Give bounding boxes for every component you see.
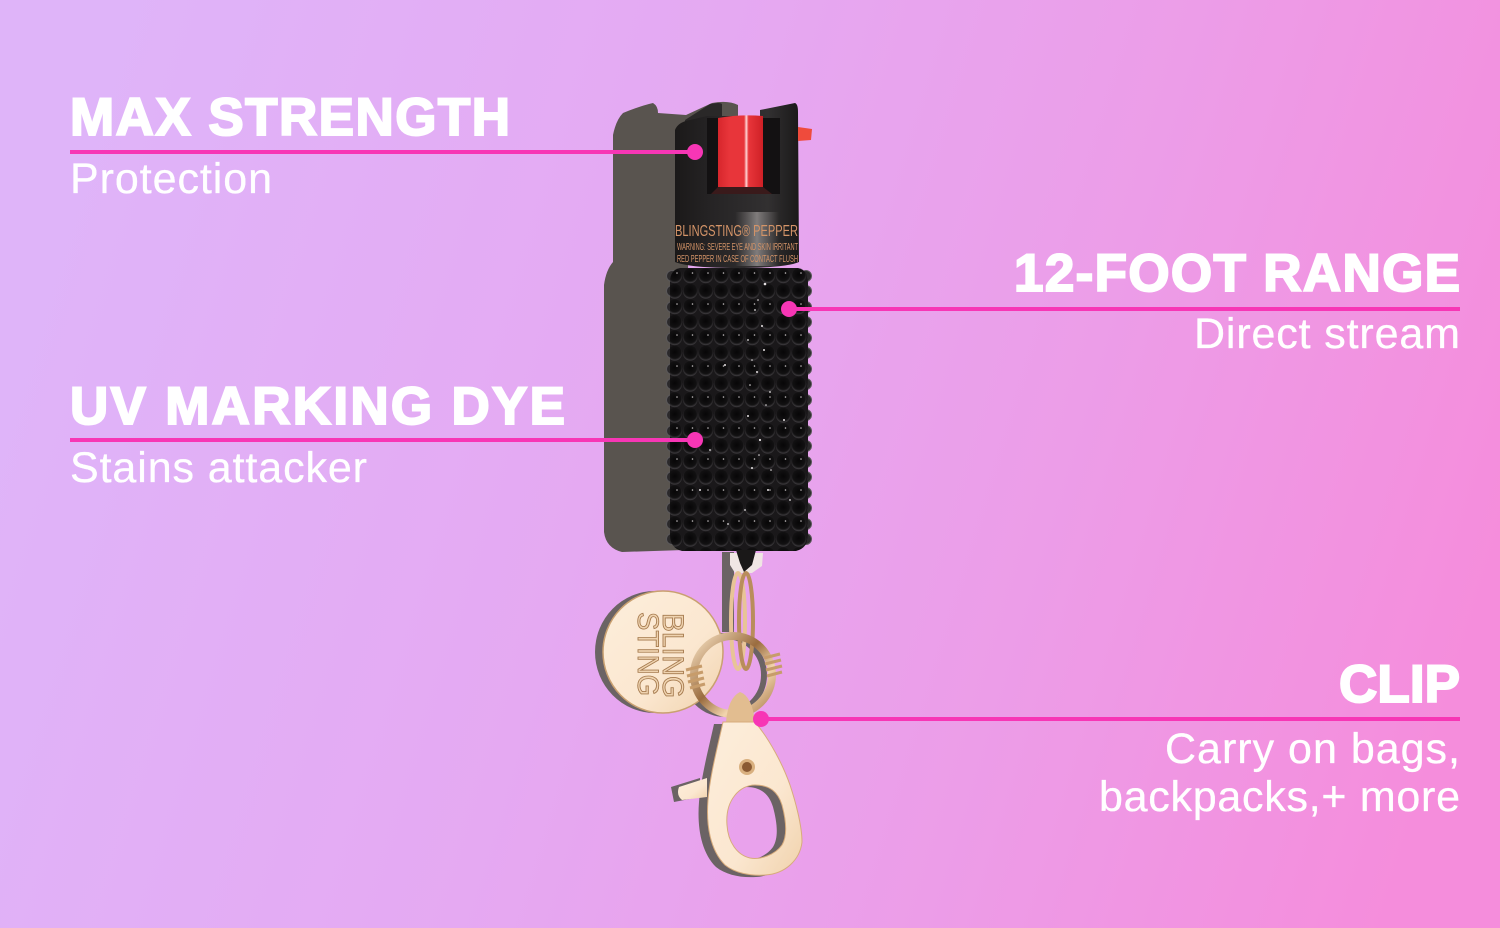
leader line to clasp — [753, 711, 1460, 727]
product: pepper spray keychain — [595, 102, 812, 877]
callout: max strength — [70, 88, 703, 203]
leader line to body — [781, 301, 1460, 317]
heading: uv marking dye: UV MARKING DYE — [70, 377, 565, 436]
cap label text: RED PEPPER IN CASE OF CONTACT FLUSH — [677, 254, 798, 265]
nozzle window — [707, 118, 780, 194]
leader line to body — [70, 432, 703, 448]
heading: 12-foot range: 12-FOOT RANGE — [1014, 244, 1460, 303]
subtext: carry on bags — [1099, 725, 1460, 821]
callout: uv marking dye — [70, 377, 703, 492]
cap label text: BLINGSTING® PEPPER — [675, 223, 798, 240]
gold coin charm — [603, 591, 723, 713]
cap label text: WARNING: SEVERE EYE AND SKIN IRRITANT — [677, 242, 798, 253]
coin engraving: BLING — [656, 613, 689, 698]
large jump ring — [686, 636, 782, 714]
cap label text — [675, 223, 798, 265]
callout: 12-foot range — [781, 244, 1460, 358]
coin engraving: STING — [631, 612, 664, 696]
scalloped edge stones — [666, 270, 812, 544]
subtext: stains attacker: Stains attacker — [70, 444, 367, 492]
subtext: carry on bags: Carry on bags, — [1165, 725, 1460, 773]
subtext: direct stream: Direct stream — [1194, 310, 1460, 358]
subtext: carry on bags: backpacks,+ more — [1099, 773, 1460, 821]
spray cap — [675, 103, 812, 268]
clasp rivet — [739, 759, 755, 775]
cap highlight band — [735, 212, 779, 266]
leader line to nozzle — [70, 144, 703, 160]
safety tab — [798, 127, 812, 141]
small split ring — [731, 573, 753, 669]
heading: clip: CLIP — [1339, 655, 1460, 714]
sparkle highlights — [699, 283, 791, 525]
clip drop shadow — [595, 552, 793, 877]
swivel bracket — [730, 550, 763, 573]
red actuator — [718, 115, 763, 187]
subtext: protection: Protection — [70, 155, 272, 203]
heading: max strength: MAX STRENGTH — [70, 88, 510, 147]
coin engraving — [631, 612, 689, 698]
product drop shadow — [604, 102, 738, 552]
lobster clasp — [678, 692, 802, 875]
callout: clip — [753, 655, 1460, 821]
rhinestone body — [666, 268, 812, 551]
